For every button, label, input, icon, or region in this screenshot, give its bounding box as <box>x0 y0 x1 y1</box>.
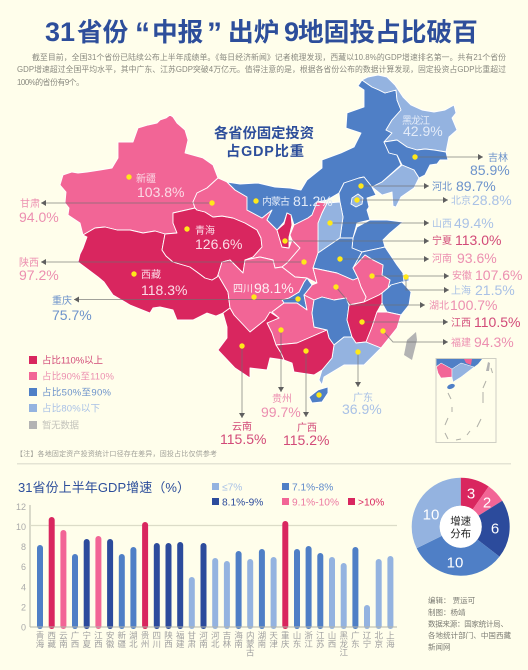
label: Anhui: 安徽 <box>452 269 472 282</box>
label: Guangxi <box>283 422 329 448</box>
province: Fujian <box>366 312 401 348</box>
label: Qinghai <box>195 224 242 252</box>
label: Henan <box>432 250 497 266</box>
arrow: Gansu <box>41 202 212 204</box>
arrow: Jiangxi <box>362 321 448 323</box>
label: Tibet <box>141 269 187 298</box>
arrow: Shanghai <box>406 277 449 290</box>
label: Inner Mongolia <box>262 193 333 209</box>
arrow: Anhui <box>372 275 449 277</box>
label: Shanghai <box>451 282 515 298</box>
title: 9 <box>284 17 299 47</box>
label: Xinjiang: 103.8% <box>137 184 184 200</box>
province: Yunnan <box>218 308 284 378</box>
intro text block <box>17 52 506 87</box>
label: Jilin <box>470 151 510 178</box>
arrow: Guangxi <box>305 351 307 417</box>
x axis province labels: 西藏 <box>46 631 58 649</box>
legend: 9.1 to 10%: 9.1%-10% <box>292 498 339 508</box>
label: Heilongjiang: 黑龙江 <box>402 114 430 127</box>
legend: up to 7% <box>212 482 242 494</box>
label: Chongqing: 重庆 <box>52 294 72 307</box>
province: Jiangxi <box>347 293 382 343</box>
label: Beijing <box>451 192 512 208</box>
legend item: below 80%: 占比80%以下 <box>42 402 100 414</box>
label: Hebei: 河北 <box>432 181 452 193</box>
province: Hainan <box>309 387 328 403</box>
map of China by province <box>60 75 457 403</box>
label: Jilin: 85.9% <box>470 162 510 178</box>
x axis province labels: 上海 <box>384 631 396 649</box>
label: Sichuan: 98.1% <box>254 280 294 296</box>
label: Shaanxi: 陕西 <box>19 256 39 269</box>
label: Ningxia: 113.0% <box>455 232 501 248</box>
arrow: Chongqing <box>74 298 298 300</box>
x axis province labels: 湖北 <box>127 631 139 649</box>
arrow: Yunnan <box>241 346 243 418</box>
province: Sichuan <box>218 257 307 332</box>
y axis labels: 2 <box>21 602 26 612</box>
label: Hubei: 湖北 <box>429 300 449 312</box>
province: Liaoning <box>372 165 419 207</box>
arrow: Beijing <box>357 199 448 201</box>
label: Guizhou: 99.7% <box>261 404 301 420</box>
province: Hubei <box>304 268 366 305</box>
label: Guangdong <box>342 391 382 417</box>
y axis labels: 8 <box>21 542 26 552</box>
label: Inner Mongolia: 内蒙古 <box>262 195 290 208</box>
x axis province labels: 甘肃 <box>186 630 198 649</box>
label: Shanxi: 49.4% <box>454 215 494 231</box>
legend: 7.1 to 8%: 7.1%-8% <box>292 482 333 494</box>
province: Zhejiang <box>382 282 411 315</box>
legend item: 50% to 90%: 占比50%至90% <box>42 386 112 398</box>
label: Heilongjiang: 42.9% <box>403 123 443 139</box>
y axis labels <box>16 502 26 632</box>
arrow: Hebei <box>361 185 429 187</box>
x axis province labels: 天津 <box>268 631 280 649</box>
label: Xinjiang: 新疆 <box>136 172 156 185</box>
province: Xinjiang <box>60 115 218 235</box>
bars <box>37 517 393 629</box>
x axis province labels: 河北 <box>209 630 221 649</box>
map heading: 占GDP比重 <box>226 143 304 160</box>
arrow: Henan <box>340 258 429 260</box>
label: Fujian <box>451 334 514 350</box>
x axis province labels: 黑龙江 <box>338 631 350 657</box>
label: Shaanxi: 97.2% <box>19 267 59 283</box>
label: Tibet: 118.3% <box>141 282 187 298</box>
x axis province labels: 重庆 <box>279 630 291 649</box>
title: 出炉 <box>228 18 279 47</box>
x axis province labels <box>34 630 396 657</box>
arrow: Jilin <box>415 156 483 158</box>
leader lines and arrows <box>41 157 483 418</box>
label: Ningxia <box>432 232 501 248</box>
title: 省份 <box>77 18 129 47</box>
label: Tibet: 西藏 <box>141 269 161 281</box>
province: Anhui <box>353 255 390 302</box>
y axis labels: 4 <box>21 582 26 592</box>
province: Shanghai <box>403 274 409 282</box>
intro text block: 截至目前，全国31个省份已陆续公布上半年成绩单。《每日经济新闻》记者梳理发现，西藏以10.8%的GDP增速排名第一。共有21个省份 <box>32 52 506 62</box>
province: Qinghai <box>162 208 262 280</box>
donut centre label: 增速 <box>450 514 472 528</box>
label: Yunnan: 115.5% <box>220 431 266 447</box>
bar chart legend <box>212 482 384 508</box>
credits: 数据来源：国家统计局、 <box>428 618 508 628</box>
donut chart: growth distribution: 10 <box>447 554 463 572</box>
label: Qinghai: 126.6% <box>195 236 242 252</box>
donut centre label: 分布 <box>450 528 471 540</box>
label: Gansu <box>19 197 59 225</box>
arrow: Ningxia <box>285 240 429 242</box>
label: Ningxia: 宁夏 <box>432 234 452 247</box>
map legend <box>29 354 115 432</box>
province: Inner Mongolia <box>227 80 401 230</box>
label: Beijing: 北京 <box>451 194 471 207</box>
label: Shanghai: 21.5% <box>475 282 515 298</box>
label: Guizhou <box>261 392 301 420</box>
title: ” <box>207 17 222 50</box>
label: Hubei: 100.7% <box>450 297 497 313</box>
province: Hebei <box>339 177 376 238</box>
legend item: no data: 暂无数据 <box>42 420 79 432</box>
credits: 各地统计部门、中国西藏 <box>428 630 512 640</box>
legend: up to 7%: ≤7% <box>222 482 242 494</box>
x axis province labels: 陕西 <box>162 630 174 649</box>
y axis labels: 6 <box>21 562 26 572</box>
province: Guangdong <box>319 337 381 385</box>
province: Guangxi <box>276 330 334 375</box>
province: Shaanxi <box>282 202 327 283</box>
province marker dots <box>126 154 418 398</box>
legend: 8.1 to 9%: 8.1%-9% <box>222 498 263 508</box>
bar chart heading: 31省份上半年GDP增速（%） <box>18 480 190 495</box>
arrow: Hubei <box>336 287 425 305</box>
footnote: 【注】各地固定资产投资统计口径存在差异，固投占比仅供参考 <box>16 449 217 458</box>
legend item: 90% to 110%: 占比90%至110% <box>42 370 115 382</box>
province: Chongqing <box>282 278 312 310</box>
x axis province labels: 吉林 <box>221 631 233 649</box>
x axis province labels: 浙江 <box>303 630 315 649</box>
x axis province labels: 河南 <box>198 630 210 648</box>
title: 中报 <box>152 18 204 47</box>
province: Guizhou <box>267 295 327 345</box>
credits: 新闻网 <box>428 642 450 652</box>
credits: 编辑： 贾运可 <box>428 595 476 605</box>
x axis province labels: 辽宁 <box>361 631 373 648</box>
province: Ningxia <box>277 213 292 248</box>
province: Henan <box>313 238 362 280</box>
y axis labels: 12 <box>16 502 26 512</box>
x axis province labels: 海南 <box>233 630 245 648</box>
x axis province labels: 四川 <box>151 631 163 648</box>
x axis province labels: 内蒙古 <box>244 630 256 657</box>
label: Henan: 93.6% <box>457 250 497 266</box>
label: Guangxi: 广西 <box>297 422 317 434</box>
label: Hebei: 89.7% <box>456 178 496 194</box>
label: Hebei <box>432 178 496 194</box>
x axis province labels: 广东 <box>349 630 361 648</box>
x axis province labels: 安徽 <box>104 630 116 649</box>
province: Heilongjiang <box>362 75 457 152</box>
intro text block: GDP增速超过全国平均水平，其中广东、江苏GDP突破4万亿元。值得注意的是，根据各省份公布的数据计算发现，固定投资占GDP比重超过 <box>17 64 506 74</box>
label: Gansu: 94.0% <box>19 209 59 225</box>
label: Guizhou: 贵州 <box>272 392 292 405</box>
label: Shanxi <box>432 215 494 231</box>
label: Guangxi: 115.2% <box>283 432 329 448</box>
label: Shanghai: 上海 <box>451 284 471 297</box>
credits: 制图：杨靖 <box>428 607 466 617</box>
x axis province labels: 山西 <box>326 630 338 649</box>
legend item: above 110%: 占比110%以上 <box>42 354 103 366</box>
label: Guangdong: 广东 <box>353 391 373 404</box>
label: Shanxi: 山西 <box>432 218 452 230</box>
map heading <box>214 124 314 160</box>
x axis province labels: 福建 <box>174 630 186 649</box>
label: Yunnan: 云南 <box>232 420 252 433</box>
label: Sichuan <box>233 280 294 296</box>
label: Chongqing: 75.7% <box>52 307 92 323</box>
label: Hubei <box>429 297 497 313</box>
label: Jiangxi: 江西 <box>451 317 471 329</box>
arrow: Guizhou <box>280 330 282 392</box>
label: Beijing: 28.8% <box>472 192 512 208</box>
label: Henan: 河南 <box>432 252 452 265</box>
title: 31 <box>45 17 75 47</box>
label: Shaanxi <box>19 256 59 283</box>
province: Shanxi <box>318 202 343 253</box>
bar chart: provincial GDP growth <box>16 502 397 657</box>
donut chart: growth distribution: 10 <box>423 506 439 524</box>
label: Qinghai: 青海 <box>195 224 215 237</box>
title: 地固投占比破百 <box>298 18 478 47</box>
label: Gansu: 甘肃 <box>20 197 40 210</box>
x axis province labels: 贵州 <box>139 630 151 648</box>
x axis province labels: 北京 <box>373 631 385 649</box>
donut chart: growth distribution: 6 <box>491 520 499 538</box>
label: Fujian: 94.3% <box>474 334 514 350</box>
label: Jiangxi: 110.5% <box>474 314 520 330</box>
x axis province labels: 青海 <box>34 630 46 649</box>
label: Jiangxi <box>451 314 520 330</box>
label: Chongqing <box>52 294 92 323</box>
x axis province labels: 新疆 <box>116 630 128 649</box>
province: Jilin <box>384 140 448 178</box>
y axis labels: 10 <box>16 522 26 532</box>
label: Anhui <box>452 267 522 283</box>
legend: above 10%: >10% <box>358 498 384 508</box>
region: Taiwan <box>404 332 417 360</box>
label: Heilongjiang <box>402 114 443 139</box>
province: Jiangsu <box>353 247 407 288</box>
label: Sichuan: 四川 <box>233 284 253 295</box>
province: Gansu <box>193 178 300 268</box>
x axis province labels: 湖南 <box>256 631 268 648</box>
donut centre label <box>450 514 472 540</box>
label: Guangdong: 36.9% <box>342 401 382 417</box>
donut chart: growth distribution: 2 <box>483 494 491 512</box>
province: Tibet <box>78 227 230 320</box>
label: Fujian: 福建 <box>451 336 471 349</box>
label: Anhui: 107.6% <box>475 267 522 283</box>
arrow: Fujian <box>383 331 448 342</box>
inset: South China Sea <box>436 358 496 442</box>
donut chart: growth distribution: 3 <box>467 486 475 502</box>
province: Shandong <box>352 220 403 252</box>
x axis province labels: 山东 <box>291 630 303 648</box>
x axis province labels: 江苏 <box>314 631 326 649</box>
intro text block: 100%的省份有9个。 <box>17 77 84 87</box>
x axis province labels: 江西 <box>92 631 104 649</box>
label: Yunnan <box>220 420 266 447</box>
map heading: 各省份固定投资 <box>214 124 314 142</box>
arrow: Guangdong <box>357 352 359 387</box>
province: Hunan <box>312 297 352 345</box>
credits <box>428 595 512 652</box>
label: Jilin: 吉林 <box>488 151 508 164</box>
x axis province labels: 云南 <box>57 631 69 648</box>
title: “ <box>135 17 150 50</box>
x axis province labels: 广西 <box>69 630 81 649</box>
arrow: Shanxi <box>330 222 429 224</box>
x axis province labels: 宁夏 <box>81 630 93 648</box>
donut chart: growth distribution <box>423 486 499 572</box>
arrow: Shaanxi <box>41 261 304 263</box>
label: Inner Mongolia: 81.2% <box>293 193 333 209</box>
y axis labels: 0 <box>21 622 26 632</box>
label: Xinjiang <box>136 172 184 200</box>
province: Beijing <box>351 194 363 207</box>
